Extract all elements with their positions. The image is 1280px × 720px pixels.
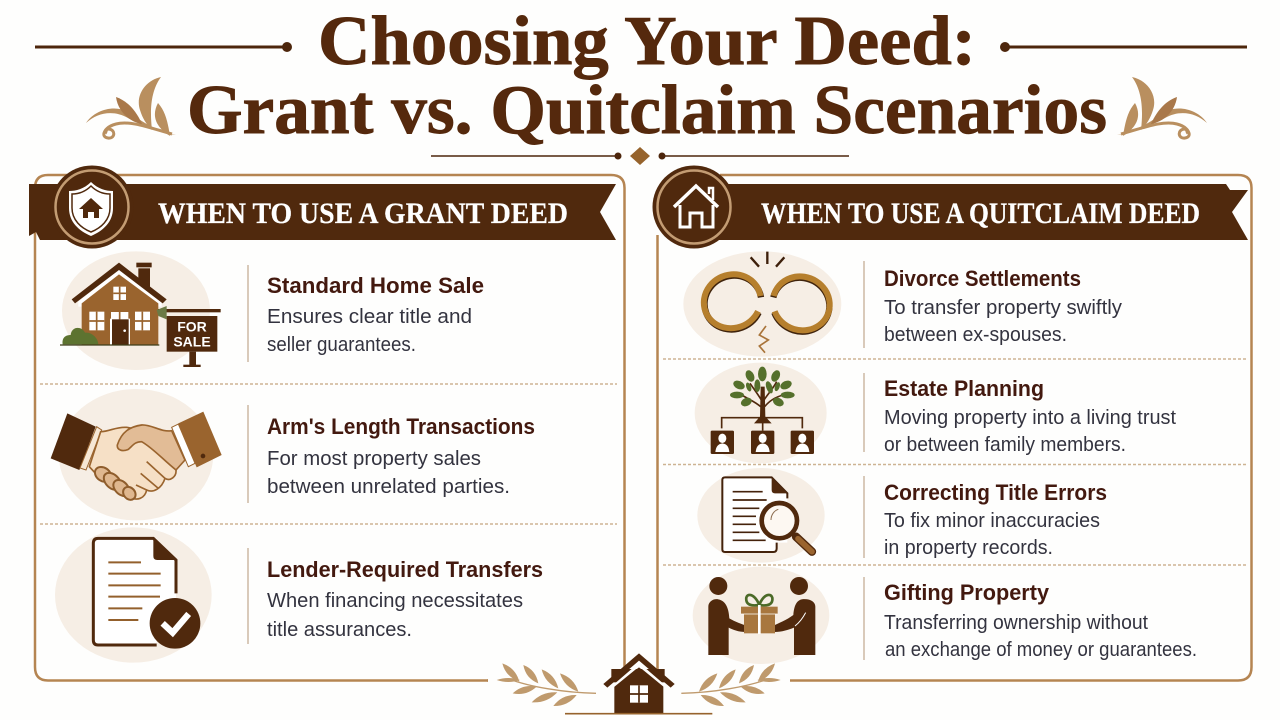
row text xyxy=(267,557,543,641)
title rule left xyxy=(35,42,292,52)
row text: Divorce Settlements xyxy=(884,266,1081,291)
row: estate planning xyxy=(695,363,1176,463)
flourish right xyxy=(1117,77,1207,138)
icon: house for sale: FOR xyxy=(177,319,207,335)
row rule xyxy=(863,577,865,660)
row text xyxy=(884,266,1122,346)
row text: Standard Home Sale xyxy=(267,273,484,298)
house icon xyxy=(603,653,675,713)
row rule xyxy=(247,405,249,503)
title line one: Choosing Your Deed: xyxy=(318,3,976,80)
row text: Arm's Length Transactions xyxy=(267,414,535,439)
row rule xyxy=(247,265,249,362)
row text: seller guarantees. xyxy=(267,334,416,356)
panel border xyxy=(35,175,624,680)
row text: title assurances. xyxy=(267,619,412,641)
icon: house for sale: SALE xyxy=(173,334,211,350)
row text xyxy=(267,273,484,356)
banner heading: WHEN TO USE A GRANT DEED xyxy=(158,197,568,230)
row text: Transferring ownership without xyxy=(884,612,1148,634)
row text: Moving property into a living trust xyxy=(884,407,1176,429)
banner ribbon xyxy=(690,184,1248,240)
banner ribbon xyxy=(29,184,616,240)
row text xyxy=(884,376,1176,456)
title bottom divider with diamond xyxy=(431,147,849,165)
row text: To transfer property swiftly xyxy=(884,297,1122,319)
title xyxy=(187,3,1107,149)
row text: To fix minor inaccuracies xyxy=(884,510,1100,532)
row text: Lender-Required Transfers xyxy=(267,557,543,582)
row rule xyxy=(863,476,865,558)
row text: Estate Planning xyxy=(884,376,1044,401)
icon: people exchanging gift xyxy=(693,567,829,664)
row rule xyxy=(863,261,865,348)
laurel right xyxy=(681,663,781,706)
row: lender-required transfers xyxy=(55,527,543,663)
row: correcting title errors xyxy=(697,468,1107,563)
icon: handshake xyxy=(51,389,222,520)
laurel left xyxy=(497,663,596,706)
row text: Gifting Property xyxy=(884,580,1050,605)
row: standard home sale xyxy=(60,251,484,370)
row text: When financing necessitates xyxy=(267,590,523,612)
panel outline xyxy=(487,175,1252,680)
row rule xyxy=(863,373,865,452)
footer emblem xyxy=(497,653,781,714)
icon: house for sale xyxy=(60,251,221,370)
row text: or between family members. xyxy=(884,434,1126,456)
flourish left xyxy=(86,77,176,138)
badge: shield xyxy=(50,166,134,248)
row text xyxy=(884,580,1197,661)
row rule xyxy=(247,548,249,644)
panel border xyxy=(658,175,1252,680)
row text: between ex-spouses. xyxy=(884,324,1067,346)
icon: document with magnifier xyxy=(697,468,825,563)
panel: quitclaim deed xyxy=(487,166,1252,680)
banner heading: WHEN TO USE A QUITCLAIM DEED xyxy=(761,197,1200,230)
panel: grant deed xyxy=(29,166,624,680)
row: arm's length transactions xyxy=(51,389,535,520)
icon: document with check xyxy=(55,527,212,663)
row text: For most property sales xyxy=(267,448,481,470)
row text xyxy=(884,480,1107,559)
row text: between unrelated parties. xyxy=(267,476,510,498)
title rule right xyxy=(1000,42,1247,52)
icon: family tree xyxy=(695,363,827,463)
row: gifting property xyxy=(693,567,1197,664)
title line two: Grant vs. Quitclaim Scenarios xyxy=(187,72,1107,149)
row text xyxy=(267,414,535,498)
badge: house xyxy=(652,166,736,248)
row text: Ensures clear title and xyxy=(267,306,472,328)
base line xyxy=(565,711,712,716)
footer gap cover xyxy=(488,677,789,685)
row text: in property records. xyxy=(884,537,1053,559)
row text: an exchange of money or guarantees. xyxy=(885,639,1197,661)
row: divorce settlements xyxy=(683,251,1122,357)
row text: Correcting Title Errors xyxy=(884,480,1107,505)
icon: broken rings xyxy=(683,251,841,357)
